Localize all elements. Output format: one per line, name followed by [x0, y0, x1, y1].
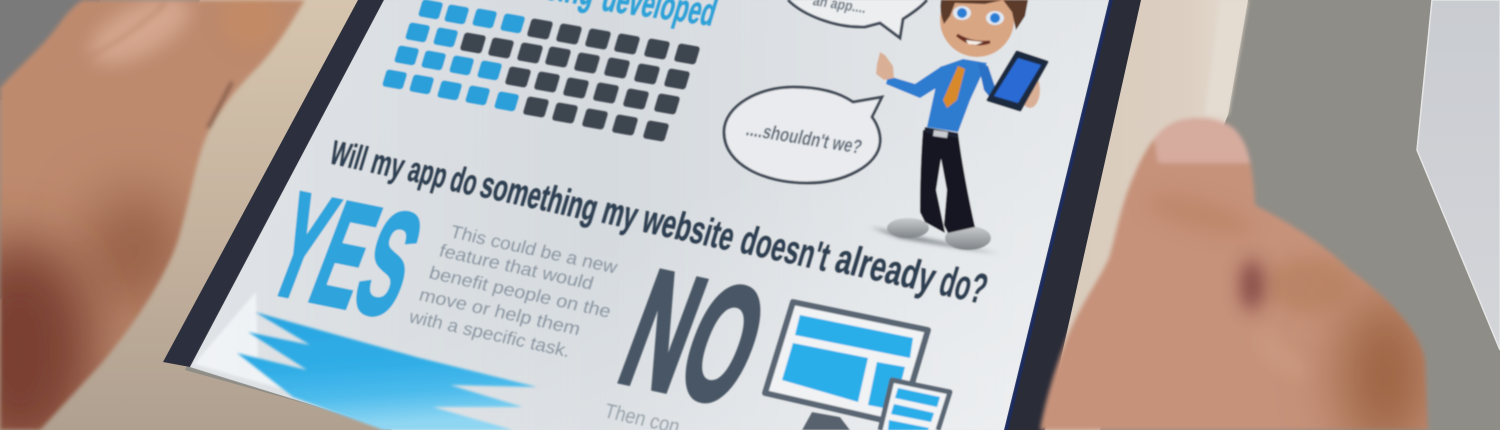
question heading: do? [934, 257, 993, 313]
YES paragraph: benefit people on the [427, 262, 613, 322]
monitor stand [802, 412, 850, 430]
left arm sleeve [886, 66, 952, 98]
shoes [887, 218, 991, 250]
question heading [326, 134, 993, 313]
icon: monitor and tablet responsive devices [765, 302, 950, 430]
thumb up hand [876, 52, 894, 80]
belt and buckle [924, 127, 958, 138]
small tablet frame [880, 380, 950, 430]
monitor frame [765, 302, 928, 424]
dark squares [460, 18, 700, 142]
blue squares [382, 0, 526, 112]
phone [988, 52, 1047, 110]
screen glare bottom left [194, 292, 300, 394]
right hand with thumb [1040, 110, 1430, 430]
question heading: app [404, 151, 452, 196]
hand behind phone [1020, 72, 1040, 108]
hand shading and finger crease [0, 0, 280, 430]
background white wall panel [1417, 0, 1500, 350]
tablet screen [190, 0, 1109, 430]
blue ribbon banner [237, 312, 537, 430]
YES paragraph: feature that would [437, 240, 596, 294]
question heading: my [597, 190, 643, 238]
tablet black edge bands [163, 0, 1141, 430]
speech bubble: shouldn't we [724, 87, 882, 183]
pictogram grid of squares [382, 0, 700, 142]
speech bubble: shouldn't we: ....shouldn't we? [744, 118, 865, 159]
screen light sheen [190, 0, 1109, 430]
YES paragraph [406, 221, 620, 361]
YES paragraph: with a specific task. [406, 306, 573, 361]
heading: being developed [527, 0, 722, 35]
trousers [920, 130, 975, 233]
question heading: do [446, 159, 483, 203]
YES paragraph: This could be a new [448, 221, 620, 277]
shadow between hand and casing [208, 82, 232, 128]
background top left grey [0, 0, 100, 100]
thumb nail highlight and shading [1143, 110, 1430, 430]
tie [943, 66, 965, 108]
head [940, 0, 1028, 57]
ground shadow [870, 227, 1000, 254]
monitor blue panes [782, 315, 913, 410]
question heading: already [830, 235, 942, 301]
small tablet blue rows [888, 388, 940, 430]
question heading: Will [326, 134, 372, 179]
YES paragraph: move or help them [417, 284, 583, 339]
speech bubble: top [788, 0, 927, 38]
right arm sleeve [978, 63, 996, 100]
cartoon man holding a phone [870, 0, 1047, 254]
left hand [0, 0, 305, 430]
shirt torso [927, 59, 987, 132]
YES heading: YES [250, 163, 440, 348]
infographic content on screen [190, 0, 1109, 430]
question heading: doesn't [735, 218, 835, 280]
question heading: website [637, 198, 740, 260]
question heading: my [367, 143, 409, 187]
question heading: something [476, 164, 603, 229]
